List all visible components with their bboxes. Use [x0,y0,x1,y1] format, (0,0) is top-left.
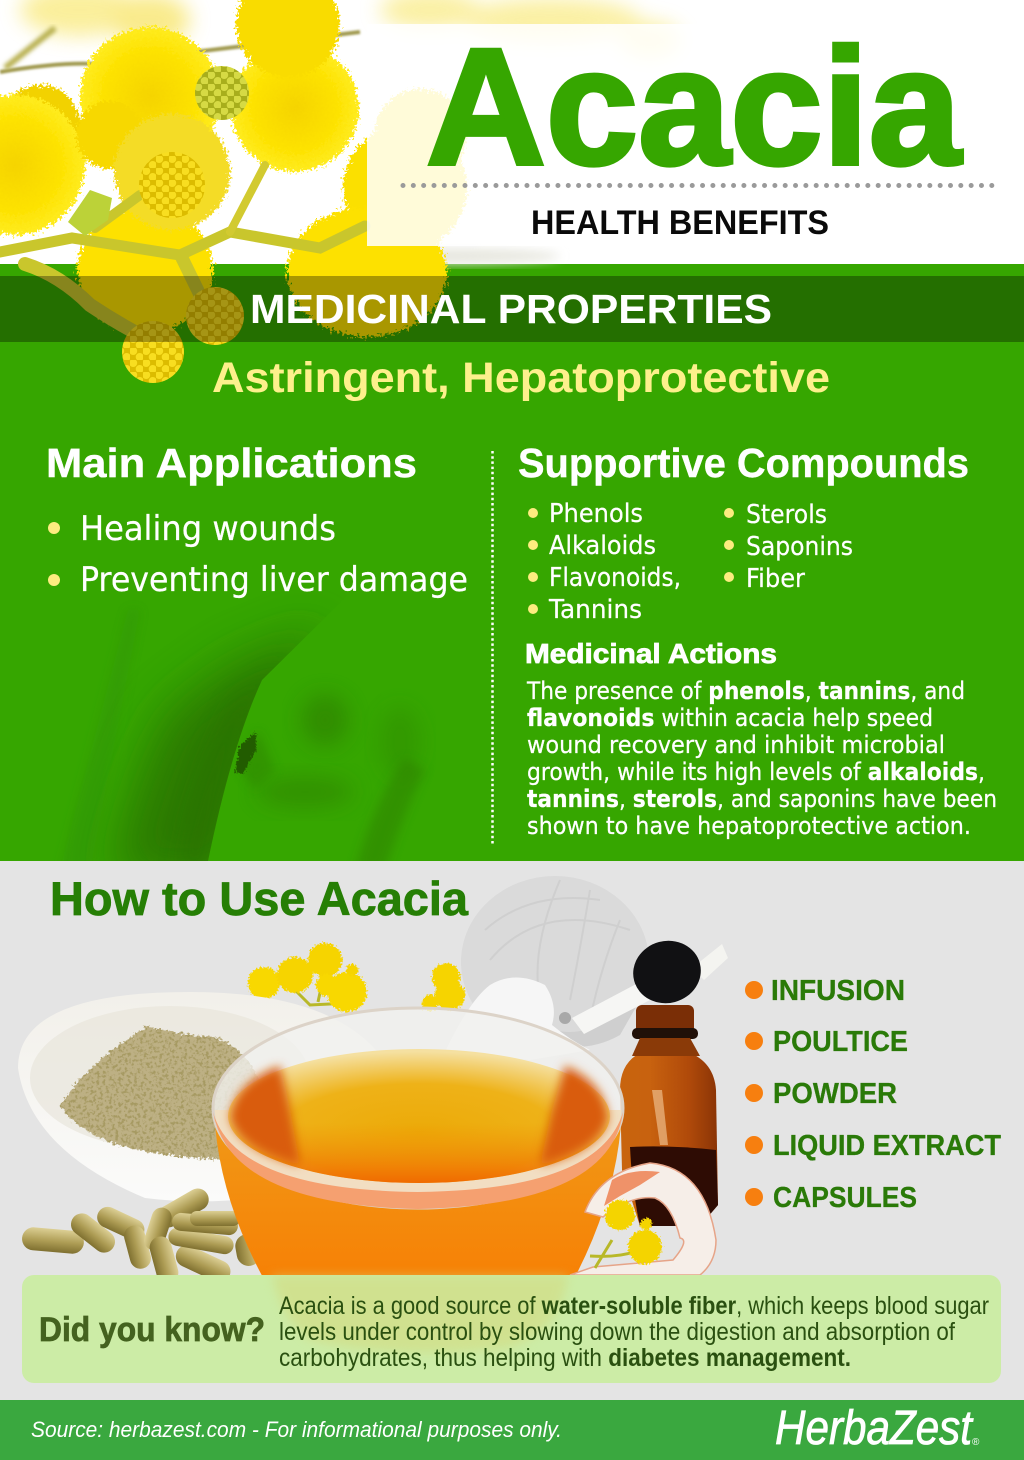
list: forms of use: INFUSION [771,975,905,1007]
panel: how to use [0,861,1024,1400]
callout: did you know: levels under control by slowing down the digestion and absorption of [279,1318,955,1346]
callout: did you know: Did you know? [39,1311,265,1349]
list: compounds: Fiber [746,564,805,594]
heading: main applications: Main Applications [46,440,417,486]
footer [0,1400,1024,1460]
image: preparations collage [18,876,728,1290]
list: forms of use [745,975,1001,1214]
subtitle: HEALTH BENEFITS [531,204,829,242]
banner: medicinal properties: MEDICINAL PROPERTIES [250,286,772,332]
list: forms of use: LIQUID EXTRACT [773,1130,1001,1162]
dotted rule [403,183,995,188]
text block: medicinal actions: wound recovery and inhibit microbial [527,731,945,759]
list: compounds: Saponins [746,532,853,562]
text block: medicinal actions: shown to have hepatoprotective action. [527,812,971,840]
panel: green medicinal section [0,264,1024,861]
footer: ® [972,1437,980,1448]
image: acacia blossoms [0,0,680,383]
list: compounds [528,499,853,625]
list: compounds: Flavonoids, [549,563,681,593]
header panel [367,24,1024,246]
callout: did you know: Acacia is a good source of water-soluble fiber, which keeps blood sugar [279,1292,989,1320]
list: compounds: Phenols [549,499,643,529]
heading: how to use: How to Use Acacia [50,872,469,925]
footer: HerbaZest [775,1402,973,1455]
icon: glass tea cup [213,1008,716,1290]
callout: did you know: carbohydrates, thus helping with diabetes management. [279,1344,851,1372]
text block: medicinal actions: tannins, sterols, and saponins have been [527,785,997,813]
icon: yellow blossoms [248,943,465,1012]
heading: medicinal actions: Medicinal Actions [525,638,777,669]
branches [0,165,365,340]
icon: dropper bottle [559,933,728,1226]
dotted divider [491,451,494,844]
list: compounds: Tannins [548,595,642,625]
list: forms of use: CAPSULES [773,1182,917,1214]
list: main applications: Preventing liver damage [80,560,468,600]
list: forms of use: POULTICE [773,1026,908,1058]
icon: flowers in handle [590,1200,662,1268]
list: compounds: Sterols [746,500,827,530]
text block: medicinal actions [526,677,997,840]
text block: medicinal actions: The presence of phenols, tannins, and [526,677,965,705]
list: compounds: Alkaloids [549,531,656,561]
icon: bowl of powder [18,992,329,1202]
list: main applications: Healing wounds [80,509,336,549]
icon: poultice [461,876,648,1050]
heading: supportive compounds: Supportive Compounds [518,440,969,486]
footer: Source: herbazest.com - For informational purposes only. [31,1417,562,1442]
text block: medicinal actions: growth, while its high levels of alkaloids, [527,758,985,786]
list: forms of use: POWDER [773,1078,897,1110]
subheading: properties: Astringent, Hepatoprotective [212,354,830,402]
banner: medicinal properties [0,276,1024,342]
image: arm with wound [67,623,424,861]
text block: medicinal actions: flavonoids within acacia help speed [527,704,933,732]
title: Acacia [426,15,963,200]
icon: capsules [22,1188,256,1275]
callout: did you know [22,1275,1001,1383]
list: main applications [48,509,468,600]
